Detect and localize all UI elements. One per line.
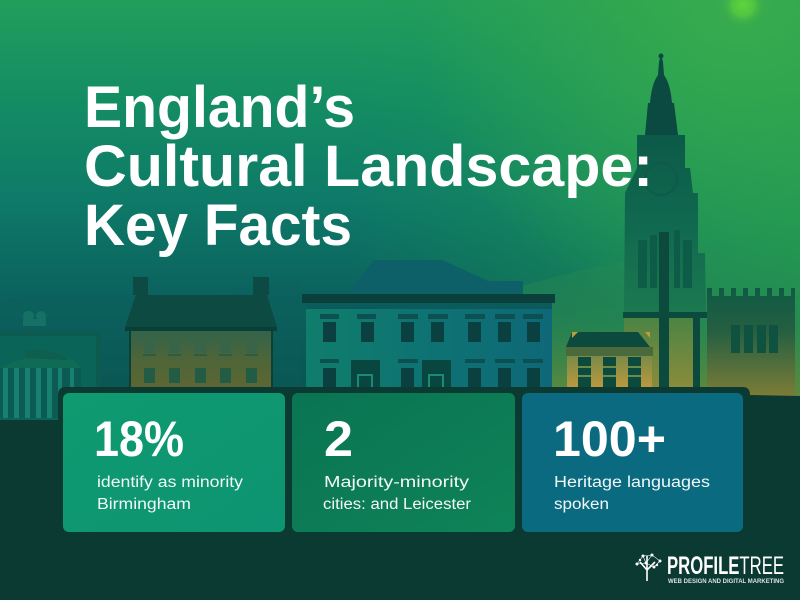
logo: ProfileTree: WEB DESIGN AND DIGITAL MARKETING bbox=[668, 578, 784, 585]
building: small amber house bbox=[566, 332, 653, 390]
card: 18% minority: Birmingham bbox=[97, 496, 191, 513]
card: 18% minority: 18% bbox=[94, 411, 184, 467]
building: castle wall bbox=[707, 288, 795, 398]
title bbox=[84, 75, 653, 258]
card: 18% minority bbox=[63, 393, 285, 532]
dark ground bbox=[0, 387, 800, 600]
icon: tree bbox=[636, 554, 662, 581]
distant hills bbox=[460, 225, 800, 400]
logo: ProfileTree bbox=[636, 552, 784, 585]
card: 2 majority-minority cities: cities: and Leicester bbox=[323, 496, 471, 513]
building: brick terrace house bbox=[125, 277, 277, 391]
card: 100+ heritage languages: 100+ bbox=[553, 411, 666, 467]
card: 100+ heritage languages: Heritage languages bbox=[554, 474, 710, 491]
card: 100+ heritage languages: spoken bbox=[554, 496, 609, 513]
card: 2 majority-minority cities: Majority-minority bbox=[324, 474, 469, 491]
building: church tower bbox=[623, 54, 707, 392]
card: 18% minority: identify as minority bbox=[97, 474, 243, 491]
title: England’s bbox=[84, 75, 355, 140]
card: 2 majority-minority cities: 2 bbox=[324, 411, 353, 467]
title: Cultural Landscape: bbox=[84, 134, 653, 199]
title: Key Facts bbox=[84, 193, 352, 258]
card: 100+ heritage languages bbox=[522, 393, 743, 532]
building: left classical hall bbox=[0, 311, 101, 421]
building: civic hall bbox=[302, 260, 555, 391]
card: 2 majority-minority cities bbox=[292, 393, 515, 532]
distant hill left bbox=[0, 280, 300, 400]
